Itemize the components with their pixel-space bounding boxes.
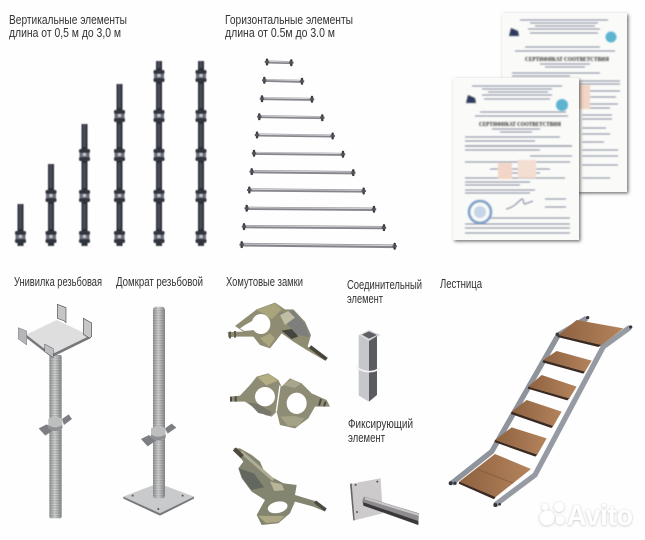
certificate: front bbox=[453, 78, 579, 240]
heading: clamps: Хомутовые замки bbox=[226, 275, 303, 289]
icon: threaded fork bbox=[18, 304, 92, 518]
watermark: Avito logo bbox=[540, 500, 633, 532]
heading: fixing element: Фиксирующий bbox=[348, 417, 413, 431]
panel: connector bbox=[347, 278, 422, 402]
panel: threaded fork bbox=[14, 275, 102, 518]
icon: clamp 2 bbox=[230, 373, 330, 428]
heading: horizontal elements: длина от 0.5м до 3.0 м bbox=[225, 26, 335, 40]
certificate: back bbox=[502, 13, 627, 192]
heading: vertical elements bbox=[9, 13, 127, 40]
heading: stairs: Лестница bbox=[440, 277, 482, 291]
heading: connector: Соединительный bbox=[347, 278, 422, 292]
icon: clamp 1 bbox=[228, 303, 327, 361]
icon: stairs bbox=[449, 316, 632, 507]
icon: clamp 3 bbox=[233, 448, 327, 525]
horizontal bars chart bbox=[239, 58, 397, 250]
heading: connector: элемент bbox=[347, 292, 383, 306]
panel: fixing element bbox=[348, 417, 419, 525]
heading: threaded fork: Унивилка резьбовая bbox=[14, 275, 102, 289]
panel: vertical elements bbox=[9, 13, 206, 246]
watermark: Avito logo: Avito bbox=[567, 500, 633, 532]
certificate: front: СЕРТИФИКАТ СООТВЕТСТВИЯ bbox=[479, 122, 562, 128]
heading: vertical elements: длина от 0,5 м до 3,0 м bbox=[9, 26, 121, 40]
panel: horizontal elements bbox=[225, 13, 397, 250]
panel: screw jack bbox=[116, 275, 203, 516]
panel: stairs bbox=[440, 277, 632, 507]
heading: horizontal elements: Горизонтальные элементы bbox=[225, 13, 353, 27]
panel: clamps bbox=[226, 275, 330, 525]
icon: connector tube bbox=[357, 330, 381, 402]
heading: horizontal elements bbox=[225, 13, 353, 40]
icon: screw jack bbox=[123, 307, 194, 516]
panel: certificates bbox=[453, 13, 627, 240]
heading: connector bbox=[347, 278, 422, 306]
heading: fixing element bbox=[348, 417, 413, 445]
icon: fixing bracket bbox=[350, 478, 419, 525]
certificate: back: СЕРТИФИКАТ СООТВЕТСТВИЯ bbox=[525, 57, 610, 63]
vertical poles chart bbox=[15, 61, 206, 246]
heading: screw jack: Домкрат резьбовой bbox=[116, 275, 203, 289]
heading: fixing element: элемент bbox=[348, 431, 385, 445]
heading: vertical elements: Вертикальные элементы bbox=[9, 13, 127, 27]
